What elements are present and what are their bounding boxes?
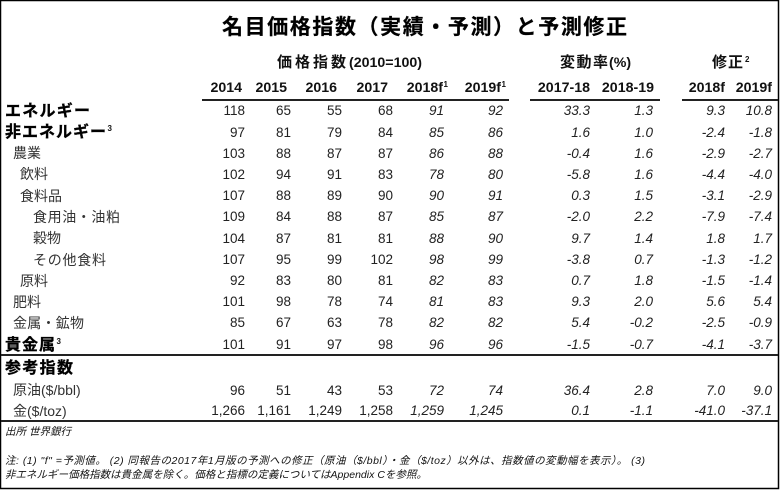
row: non-energy: 1.6 — [571, 125, 590, 140]
year headers: 2018f — [689, 80, 725, 96]
row: agriculture: 87 — [378, 146, 393, 161]
notes: 非エネルギー価格指数は貴金属を除く。価格と指標の定義についてはAppendix Cを参照。 — [5, 469, 427, 481]
column group headings: 修正 — [712, 53, 743, 71]
notes: 注: (1) "f" =予測値。 (2) 同報告の2017年1月版の予測への修正（原油（$/bbl）・金（$/toz）以外は、指数値の変動幅を表示）。 (3) — [5, 455, 645, 467]
row: beverages: 1.6 — [634, 167, 653, 182]
year headers: 2019f — [736, 80, 772, 96]
row: precious metals — [5, 335, 772, 354]
source: 出所 世界銀行 — [5, 426, 72, 438]
row: crude oil: 96 — [230, 383, 245, 398]
row: raw materials: -1.4 — [749, 273, 772, 288]
row: precious metals: -1.5 — [567, 337, 590, 352]
row: energy: 118 — [223, 103, 245, 118]
row: fertilizers: 74 — [378, 294, 393, 309]
row: non-energy: 86 — [488, 125, 503, 140]
row: other food: 95 — [276, 252, 291, 267]
row: metals and minerals — [13, 315, 772, 331]
row: crude oil — [13, 382, 772, 398]
row: gold — [13, 403, 772, 419]
row: precious metals: 貴金属 — [5, 335, 55, 354]
row: agriculture: 86 — [429, 146, 444, 161]
row: other food: -3.8 — [567, 252, 590, 267]
row: fertilizers: 9.3 — [571, 294, 590, 309]
row: oils and meals: 87 — [488, 209, 503, 224]
row: other food — [33, 252, 772, 268]
row: beverages: 78 — [429, 167, 444, 182]
row: crude oil: 51 — [276, 383, 291, 398]
row: crude oil: 2.8 — [633, 383, 653, 398]
row: fertilizers: 81 — [429, 294, 444, 309]
row: fertilizers: 83 — [488, 294, 503, 309]
row: food: 88 — [276, 188, 291, 203]
row: oils and meals: 食用油・油粕 — [33, 209, 120, 225]
row: gold: 1,258 — [359, 403, 393, 418]
row: gold: 0.1 — [571, 403, 590, 418]
row: oils and meals: -7.9 — [702, 209, 725, 224]
column group headings: (2010=100) — [349, 55, 422, 71]
row: food: 0.3 — [571, 188, 590, 203]
row: raw materials — [20, 273, 772, 289]
row: other food: 98 — [429, 252, 444, 267]
row: agriculture: 88 — [276, 146, 291, 161]
row: metals and minerals: 78 — [378, 315, 393, 330]
row: food: 90 — [429, 188, 444, 203]
year headers: 1 — [502, 80, 506, 89]
row: non-energy: 79 — [327, 125, 342, 140]
row: beverages: -4.0 — [749, 167, 772, 182]
row: non-energy: 84 — [378, 125, 393, 140]
row: food — [20, 188, 772, 204]
row: beverages: 83 — [378, 167, 393, 182]
row: oils and meals: 85 — [429, 209, 444, 224]
row: grains: 穀物 — [33, 230, 61, 246]
row: grains: 9.7 — [571, 231, 590, 246]
row: crude oil: 原油($/bbl) — [13, 382, 81, 398]
row: metals and minerals: 82 — [429, 315, 444, 330]
row: raw materials: 81 — [378, 273, 393, 288]
row: energy: 92 — [488, 103, 503, 118]
row: gold: 1,266 — [211, 403, 245, 418]
row: other food: 0.7 — [634, 252, 653, 267]
row: energy: エネルギー — [5, 102, 90, 120]
row: fertilizers: 5.6 — [706, 294, 725, 309]
row: beverages: 102 — [222, 167, 245, 182]
row: metals and minerals: 5.4 — [571, 315, 590, 330]
row: food: 食料品 — [20, 188, 62, 204]
row: precious metals: 97 — [327, 337, 342, 352]
year headers: 2016 — [305, 80, 337, 96]
row: energy: 65 — [276, 103, 291, 118]
year headers: 2014 — [210, 80, 242, 96]
row: precious metals: -4.1 — [702, 337, 725, 352]
row: non-energy: -2.4 — [702, 125, 725, 140]
row: raw materials: 80 — [327, 273, 342, 288]
row: energy: 91 — [429, 103, 444, 118]
row: raw materials: 83 — [276, 273, 291, 288]
row: non-energy: 3 — [108, 124, 112, 133]
row: fertilizers: 98 — [276, 294, 291, 309]
row: metals and minerals: -0.2 — [630, 315, 653, 330]
row: gold: -41.0 — [694, 403, 725, 418]
row: raw materials: 83 — [488, 273, 503, 288]
row: other food: 102 — [370, 252, 393, 267]
row: grains: 1.8 — [706, 231, 725, 246]
column group headings — [277, 53, 750, 71]
row: precious metals: -0.7 — [630, 337, 653, 352]
row: agriculture — [13, 145, 772, 161]
row: grains: 87 — [276, 231, 291, 246]
row: precious metals: 3 — [56, 337, 62, 346]
row: crude oil: 9.0 — [753, 383, 772, 398]
row: gold: 1,249 — [308, 403, 342, 418]
row: metals and minerals: -0.9 — [749, 315, 772, 330]
row: energy: 10.8 — [746, 103, 772, 118]
row: food: 1.5 — [634, 188, 653, 203]
row: beverages: 飲料 — [20, 166, 48, 182]
row: gold: 1,161 — [257, 403, 291, 418]
row: non-energy: 81 — [276, 125, 291, 140]
row: oils and meals: 84 — [276, 209, 291, 224]
row: metals and minerals: 金属・鉱物 — [13, 315, 84, 331]
row: other food: -1.3 — [702, 252, 725, 267]
row: fertilizers: 2.0 — [633, 294, 653, 309]
row: non-energy — [5, 123, 772, 141]
row: food: 91 — [488, 188, 503, 203]
row: fertilizers: 78 — [327, 294, 342, 309]
row: agriculture: -0.4 — [567, 146, 590, 161]
title: 名目価格指数（実績・予測）と予測修正 — [222, 16, 627, 39]
row: crude oil: 7.0 — [706, 383, 725, 398]
row: beverages: -4.4 — [702, 167, 725, 182]
row: crude oil: 53 — [378, 383, 393, 398]
year headers: 2015 — [255, 80, 287, 96]
row: fertilizers — [13, 294, 772, 310]
row: grains: 88 — [429, 231, 444, 246]
row: other food: 99 — [327, 252, 342, 267]
row: agriculture: 103 — [222, 146, 245, 161]
row: grains — [33, 230, 772, 246]
year headers: 2018f — [407, 80, 443, 96]
row: energy — [5, 102, 772, 120]
row: grains: 1.4 — [634, 231, 653, 246]
row: raw materials: -1.5 — [702, 273, 725, 288]
row: oils and meals: -2.0 — [567, 209, 590, 224]
row: grains: 81 — [378, 231, 393, 246]
row: food: -3.1 — [702, 188, 725, 203]
row: precious metals: 98 — [378, 337, 393, 352]
row: energy: 55 — [327, 103, 342, 118]
row: other food: 99 — [488, 252, 503, 267]
row: beverages: 80 — [488, 167, 503, 182]
row: food: 107 — [222, 188, 245, 203]
column group headings: (%) — [609, 55, 631, 71]
row: precious metals: 101 — [222, 337, 245, 352]
row: oils and meals: 88 — [327, 209, 342, 224]
row: precious metals: 96 — [429, 337, 444, 352]
row: agriculture: -2.9 — [702, 146, 725, 161]
row: other food: 107 — [222, 252, 245, 267]
year headers: 1 — [444, 80, 448, 89]
row: metals and minerals: -2.5 — [702, 315, 725, 330]
row: oils and meals — [33, 209, 772, 225]
row: agriculture: 農業 — [13, 145, 41, 161]
row: raw materials: 0.7 — [571, 273, 590, 288]
row: gold: 金($/toz) — [13, 403, 67, 419]
row: beverages: -5.8 — [567, 167, 590, 182]
row: raw materials: 92 — [230, 273, 245, 288]
row: metals and minerals: 82 — [488, 315, 503, 330]
row: crude oil: 43 — [327, 383, 342, 398]
row: fertilizers: 101 — [222, 294, 245, 309]
row: grains: 104 — [222, 231, 245, 246]
row: other food: その他食料 — [33, 252, 106, 268]
row: oils and meals: 2.2 — [633, 209, 653, 224]
row: metals and minerals: 63 — [327, 315, 342, 330]
row: gold: -37.1 — [741, 403, 772, 418]
column group headings: 2 — [745, 55, 750, 64]
row: precious metals: 96 — [488, 337, 503, 352]
row: raw materials: 1.8 — [634, 273, 653, 288]
row: energy: 1.3 — [634, 103, 653, 118]
row: non-energy: -1.8 — [749, 125, 772, 140]
row: crude oil: 72 — [429, 383, 444, 398]
notes — [5, 455, 645, 481]
row: agriculture: 88 — [488, 146, 503, 161]
row: agriculture: 87 — [327, 146, 342, 161]
year headers: 2017-18 — [538, 80, 590, 96]
year headers: 2018-19 — [602, 80, 654, 96]
row: gold: -1.1 — [630, 403, 653, 418]
row: crude oil: 74 — [488, 383, 503, 398]
row: gold: 1,259 — [410, 403, 444, 418]
row: crude oil: 36.4 — [564, 383, 590, 398]
column group headings: 変動率 — [560, 53, 608, 71]
row: food: -2.9 — [749, 188, 772, 203]
row: precious metals: 91 — [276, 337, 291, 352]
row: agriculture: -2.7 — [749, 146, 772, 161]
row: grains: 1.7 — [753, 231, 772, 246]
row: metals and minerals: 85 — [230, 315, 245, 330]
row: fertilizers: 5.4 — [753, 294, 772, 309]
row: agriculture: 1.6 — [634, 146, 653, 161]
row: food: 89 — [327, 188, 342, 203]
row: oils and meals: -7.4 — [749, 209, 772, 224]
year headers: 2017 — [356, 80, 388, 96]
row: beverages — [20, 166, 772, 182]
column group headings: 価格指数 — [277, 53, 346, 71]
row: non-energy: 85 — [429, 125, 444, 140]
row: metals and minerals: 67 — [276, 315, 291, 330]
row: beverages: 94 — [276, 167, 291, 182]
row: raw materials: 原料 — [20, 273, 48, 289]
row: food: 90 — [378, 188, 393, 203]
row: oils and meals: 109 — [222, 209, 245, 224]
row: grains: 90 — [488, 231, 503, 246]
row: energy: 9.3 — [706, 103, 725, 118]
row: non-energy: 1.0 — [634, 125, 653, 140]
section heading: reference indices: 参考指数 — [5, 359, 73, 377]
row: oils and meals: 87 — [378, 209, 393, 224]
row: beverages: 91 — [327, 167, 342, 182]
row: non-energy: 非エネルギー — [5, 123, 106, 141]
row: gold: 1,245 — [469, 403, 503, 418]
year headers: 2019f — [465, 80, 501, 96]
row: other food: -1.2 — [749, 252, 772, 267]
year headers — [210, 80, 772, 96]
row: grains: 81 — [327, 231, 342, 246]
row: energy: 68 — [378, 103, 393, 118]
row: non-energy: 97 — [230, 125, 245, 140]
row: energy: 33.3 — [564, 103, 590, 118]
row: fertilizers: 肥料 — [13, 294, 41, 310]
row: raw materials: 82 — [429, 273, 444, 288]
row: precious metals: -3.7 — [749, 337, 772, 352]
